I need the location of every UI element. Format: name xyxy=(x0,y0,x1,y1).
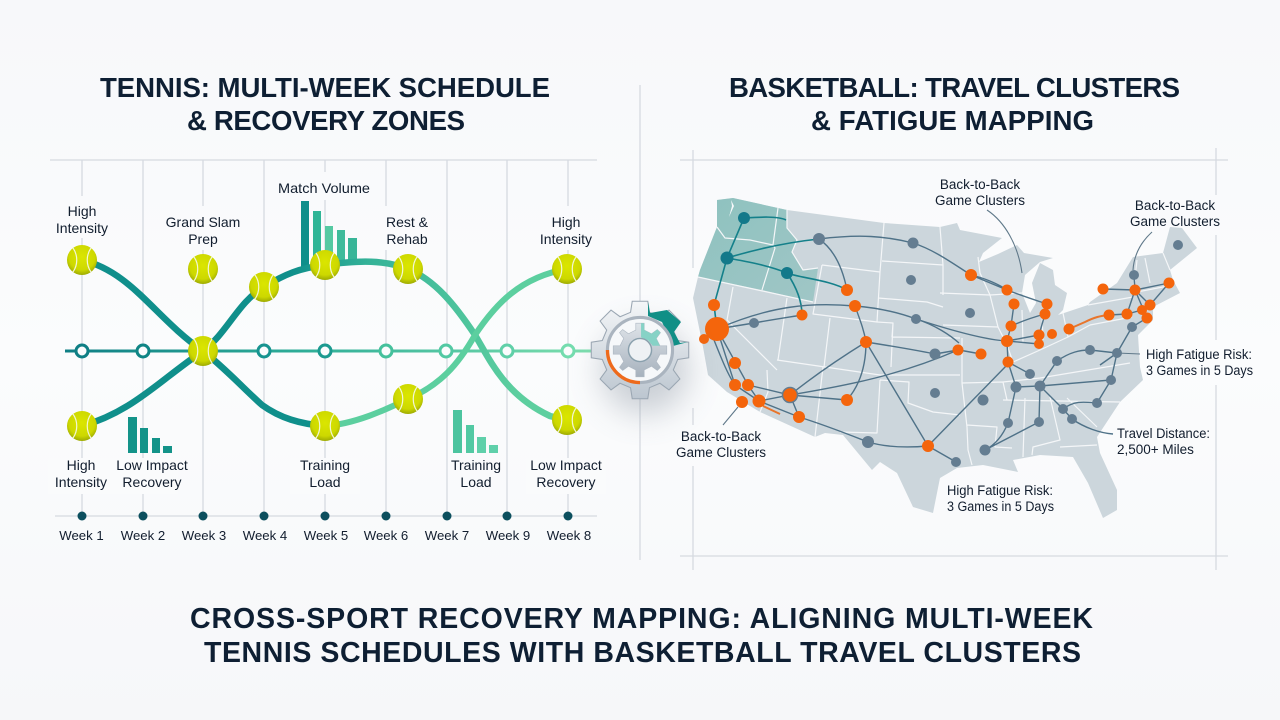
map callouts: 3 Games in 5 Days xyxy=(947,499,1054,514)
map callouts: Travel Distance: xyxy=(1117,426,1210,441)
timeline: recovery centre line xyxy=(65,350,600,352)
map callouts: Game Clusters xyxy=(935,193,1025,208)
week axis: Week 6 xyxy=(364,528,408,543)
week axis: Week 1 xyxy=(59,528,104,543)
chart labels: Recovery xyxy=(122,474,182,490)
heading: basketball xyxy=(729,72,1180,136)
chart labels: Intensity xyxy=(540,231,592,247)
route: orange fatigue segment xyxy=(763,315,1109,414)
bars: training load xyxy=(453,410,498,453)
map callouts: High Fatigue Risk: xyxy=(1146,347,1252,362)
chart labels xyxy=(48,180,606,494)
map: United States xyxy=(693,198,1197,518)
chart labels: High xyxy=(552,214,580,230)
chart labels: Training xyxy=(300,457,350,473)
curve: rising recovery wave xyxy=(325,269,567,426)
chart labels: Load xyxy=(309,474,341,490)
bars: low impact recovery xyxy=(128,417,172,453)
teal city nodes xyxy=(720,212,793,279)
icon: gear linking both sports xyxy=(591,301,689,414)
chart labels: Prep xyxy=(188,231,218,247)
heading: tennis: TENNIS: MULTI-WEEK SCHEDULE xyxy=(100,72,550,103)
callout leaders xyxy=(723,210,1152,425)
heading: basketball: & FATIGUE MAPPING xyxy=(811,105,1094,136)
curve: lower load wave xyxy=(82,262,567,426)
chart labels: Grand Slam xyxy=(166,214,240,230)
chart labels: Low Impact xyxy=(530,457,602,473)
map callouts: Back-to-Back xyxy=(681,429,761,444)
timeline nodes xyxy=(76,345,574,357)
map callouts: 3 Games in 5 Days xyxy=(1146,363,1253,378)
chart labels: Intensity xyxy=(56,220,108,236)
orange cluster nodes xyxy=(699,269,1174,452)
panel: basketball map xyxy=(676,148,1253,570)
week axis: Week 7 xyxy=(425,528,469,543)
map: highlighted north-west region xyxy=(698,198,818,302)
heading: tennis xyxy=(100,72,550,136)
footer title xyxy=(190,603,1093,669)
chart labels: Rest & xyxy=(386,214,429,230)
week axis: Week 9 xyxy=(486,528,530,543)
heading: basketball: BASKETBALL: TRAVEL CLUSTERS xyxy=(729,72,1180,103)
chart labels: High xyxy=(68,203,96,219)
chart labels: Intensity xyxy=(55,474,107,490)
week axis: Week 3 xyxy=(182,528,226,543)
map: state borders xyxy=(698,208,1173,465)
chart labels: Training xyxy=(451,457,501,473)
centre divider xyxy=(639,85,641,560)
grey city nodes xyxy=(749,233,1183,467)
footer title: CROSS-SPORT RECOVERY MAPPING: ALIGNING MULTI-WEEK xyxy=(190,603,1093,635)
week axis: Week 8 xyxy=(547,528,591,543)
chart labels: High xyxy=(67,457,95,473)
chart labels: Recovery xyxy=(536,474,596,490)
week axis: Week 5 xyxy=(304,528,348,543)
footer title: TENNIS SCHEDULES WITH BASKETBALL TRAVEL CLUSTERS xyxy=(204,637,1081,669)
map: travel routes xyxy=(714,236,1169,462)
map callouts: Back-to-Back xyxy=(1135,198,1215,213)
map callouts: Back-to-Back xyxy=(940,177,1020,192)
curve: upper load wave xyxy=(82,260,325,426)
panel: tennis schedule chart xyxy=(48,160,606,543)
map callouts: 2,500+ Miles xyxy=(1117,442,1194,457)
chart labels: Rehab xyxy=(386,231,428,247)
map callouts: Game Clusters xyxy=(676,445,766,460)
map: Puget Sound inlet xyxy=(729,200,734,217)
chart labels: Load xyxy=(460,474,492,490)
heading: tennis: & RECOVERY ZONES xyxy=(187,105,465,136)
week axis: Week 2 xyxy=(121,528,165,543)
chart labels: Low Impact xyxy=(116,457,188,473)
chart labels: Match Volume xyxy=(278,180,370,196)
map callouts: Game Clusters xyxy=(1130,214,1220,229)
week axis: Week 4 xyxy=(243,528,287,543)
map callouts: High Fatigue Risk: xyxy=(947,483,1053,498)
map callouts xyxy=(676,177,1253,514)
week axis xyxy=(59,512,591,543)
bars: match volume xyxy=(301,201,357,267)
tennis balls xyxy=(67,245,582,441)
map: teal travel routes xyxy=(714,217,847,329)
